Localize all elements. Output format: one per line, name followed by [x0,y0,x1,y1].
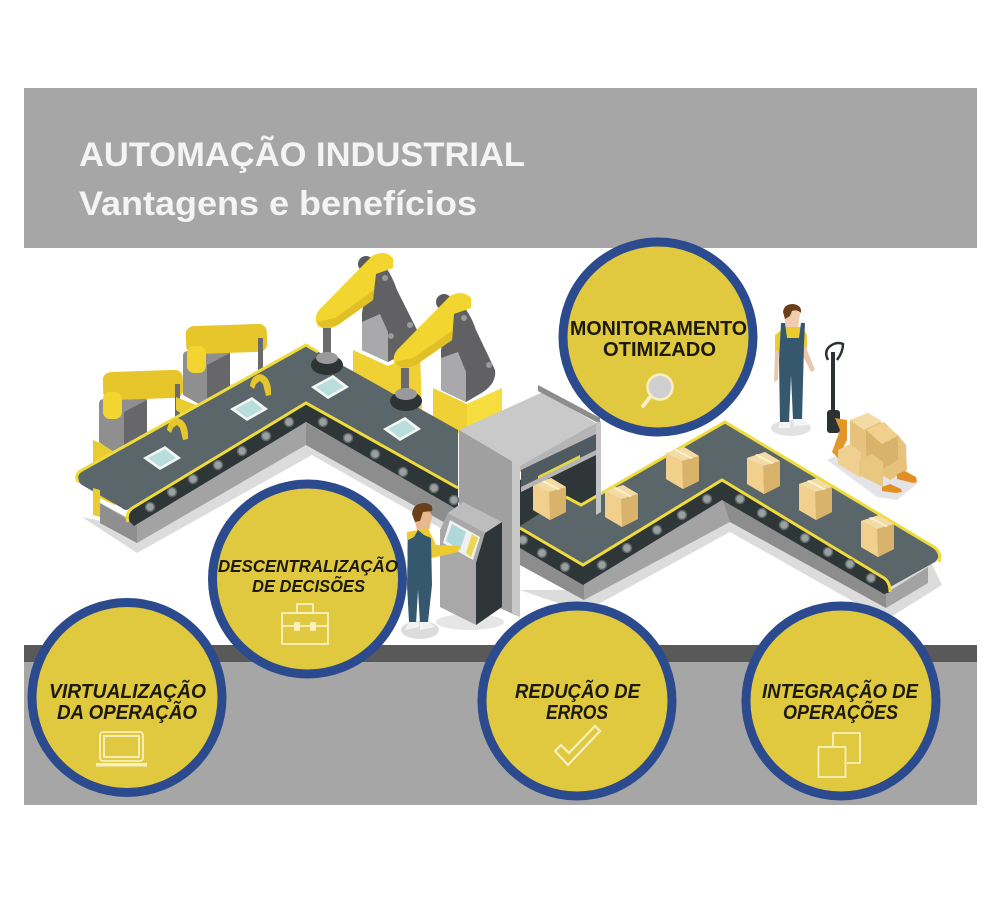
circle: reducao de erros [482,606,672,796]
header band [24,88,977,248]
robot 3 [311,253,417,375]
boxes on right conveyor [533,447,894,557]
pallet jack with boxes [826,343,918,500]
conveyor: right [518,422,940,608]
circle: monitoramento otimizado [563,242,753,432]
robot arms behind the conveyor (small) [93,324,267,505]
robot 2 [176,324,267,420]
grippers over the belt [167,374,271,440]
machine opening [520,440,596,550]
subtitle: Vantagens e benefícios [79,185,477,223]
circle: virtualizacao da operacao: VIRTUALIZAÇÃO [49,680,206,703]
title: AUTOMAÇÃO INDUSTRIAL [79,136,525,174]
circle: integracao de operacoes [746,606,936,796]
inspection machine [459,385,601,617]
icon: magnifier [643,374,672,406]
circle: monitoramento otimizado: OTIMIZADO [603,339,716,361]
robot 3 base behind belt [353,350,422,412]
worker standing [771,304,815,436]
circle: reducao de erros: REDUÇÃO DE [515,680,641,703]
papers on belt [143,375,421,470]
circle: virtualizacao da operacao [32,602,222,792]
icon: check mark [555,726,600,765]
circle: descentralizacao de decisoes [212,484,402,674]
circle: virtualizacao da operacao: DA OPERAÇÃO [57,701,197,724]
circle: integracao de operacoes: OPERAÇÕES [783,700,899,724]
circle: descentralizacao de decisoes: DESCENTRALIZAÇÃO [218,555,398,576]
icon: overlapping squares [818,733,860,777]
robot 1 [93,370,183,505]
robot 4 base behind belt [433,388,502,434]
conveyor: left [77,345,459,543]
circle: reducao de erros: ERROS [546,702,609,724]
circle: descentralizacao de decisoes: DE DECISÕES [252,575,365,596]
circle: monitoramento otimizado: MONITORAMENTO [570,318,747,340]
circle: integracao de operacoes: INTEGRAÇÃO DE [762,680,919,703]
control kiosk [436,502,504,630]
floor band [24,645,977,805]
rollers [146,418,458,512]
icon: briefcase [282,604,328,644]
floor shadows under conveyors [82,425,942,620]
icon: laptop [96,732,147,766]
robot 4 [390,293,495,411]
worker at the kiosk [401,503,460,639]
